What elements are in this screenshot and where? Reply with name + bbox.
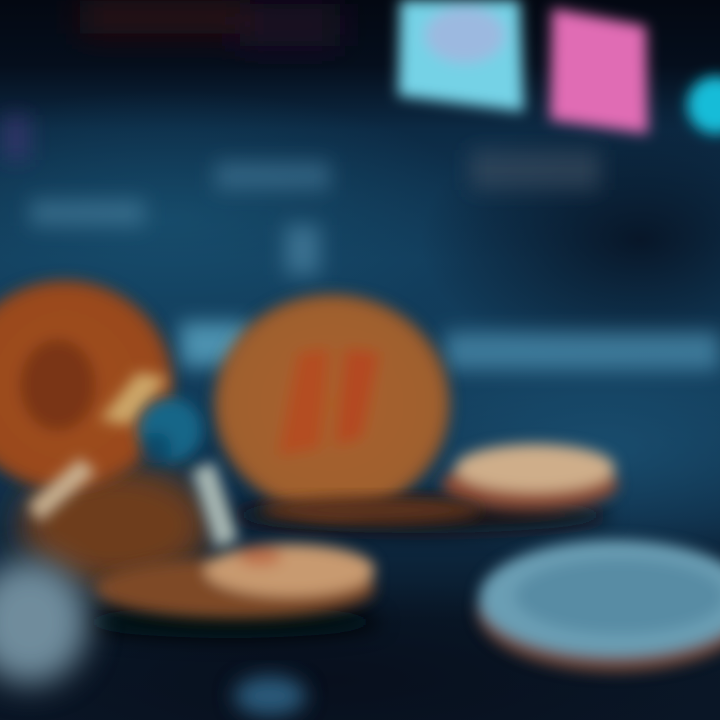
plate lower (95, 544, 375, 618)
dark red glow at top (80, 0, 340, 46)
highlights (28, 372, 238, 548)
light blue band (180, 322, 720, 370)
cyan screen panel (398, 0, 524, 112)
cyan circle (687, 76, 720, 134)
disc bottom right (477, 540, 720, 672)
coin base (260, 496, 480, 524)
shadow under coins (80, 497, 610, 638)
small blob bottom (234, 676, 306, 716)
coin: centre (214, 294, 450, 514)
faint blurred labels (2, 115, 600, 275)
lower brown mass (20, 465, 210, 585)
blue ball (138, 398, 202, 464)
plate right (442, 444, 618, 510)
coin: left (0, 280, 173, 490)
disc bottom left (0, 560, 88, 684)
pink screen panel (550, 8, 648, 134)
